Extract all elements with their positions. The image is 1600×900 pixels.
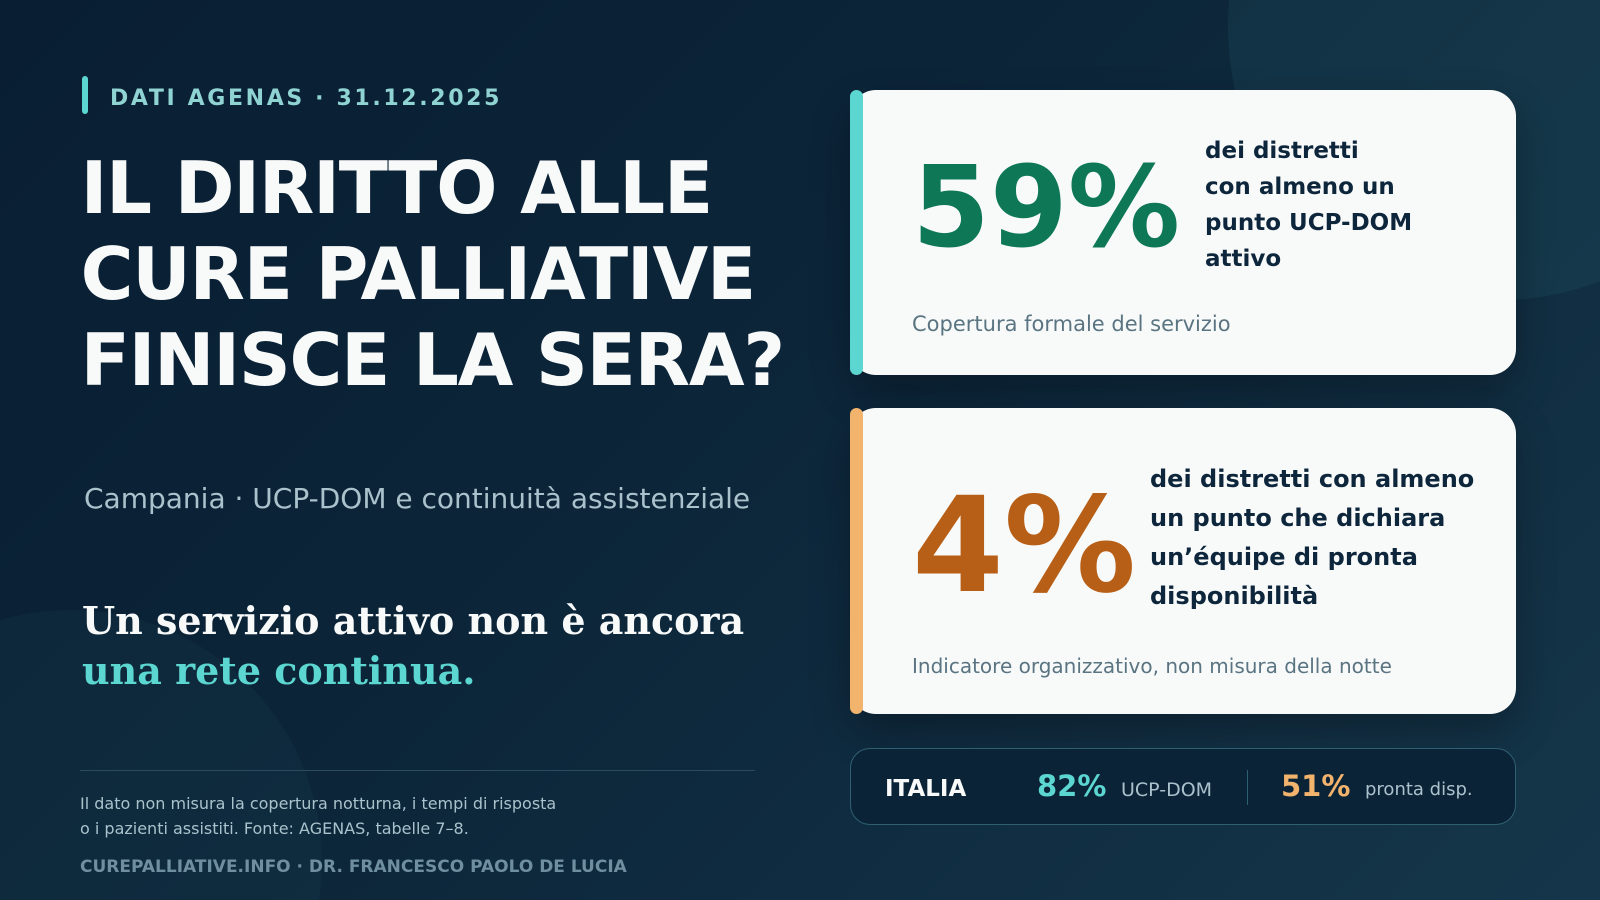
statement: Un servizio attivo non è ancora xyxy=(82,598,744,643)
stat 59% description: dei distretti xyxy=(1205,138,1359,164)
footer divider xyxy=(80,770,755,771)
stat 4% description: un’équipe di pronta xyxy=(1150,543,1418,571)
Italia label: ITALIA xyxy=(885,776,966,802)
title xyxy=(81,146,784,402)
51% value: 51% xyxy=(1281,769,1350,803)
footnote: o i pazienti assistiti. Fonte: AGENAS, tabelle 7–8. xyxy=(80,819,469,838)
stat 59% description: attivo xyxy=(1205,246,1281,272)
stat 4%: 4% xyxy=(912,469,1136,623)
card 2 accent edge xyxy=(850,408,863,714)
title: CURE PALLIATIVE xyxy=(81,232,755,316)
eyebrow text: DATI AGENAS · 31.12.2025 xyxy=(110,86,502,110)
UCP-DOM label: UCP-DOM xyxy=(1121,779,1212,801)
card: 59% xyxy=(850,90,1516,375)
card 1 note: Copertura formale del servizio xyxy=(912,312,1231,336)
stat 59% description: con almeno un xyxy=(1205,174,1395,200)
stat 59%: 59% xyxy=(912,143,1180,273)
Italy comparison bar xyxy=(850,748,1516,825)
title: IL DIRITTO ALLE xyxy=(81,146,712,230)
statement: una rete continua. xyxy=(82,648,475,693)
stat 59% description: punto UCP-DOM xyxy=(1205,210,1412,236)
stat 4% description: disponibilità xyxy=(1150,582,1318,610)
82% value: 82% xyxy=(1037,769,1106,803)
footnote: Il dato non misura la copertura notturna, i tempi di risposta xyxy=(80,794,556,813)
card 2 note: Indicatore organizzativo, non misura della notte xyxy=(912,654,1392,678)
credit: CUREPALLIATIVE.INFO · DR. FRANCESCO PAOLO DE LUCIA xyxy=(80,857,627,877)
stat 4% description xyxy=(1150,465,1474,610)
card: 4% xyxy=(850,408,1516,714)
eyebrow accent bar xyxy=(82,76,88,114)
stat 4% description: dei distretti con almeno xyxy=(1150,465,1474,493)
title: FINISCE LA SERA? xyxy=(81,318,784,402)
divider xyxy=(1247,770,1248,805)
subtitle: Campania · UCP-DOM e continuità assistenziale xyxy=(84,482,750,515)
card 1 accent edge xyxy=(850,90,863,375)
stat 59% description xyxy=(1205,138,1412,272)
pronta disp. label: pronta disp. xyxy=(1365,779,1473,800)
statement xyxy=(82,598,744,693)
footnote xyxy=(80,794,556,838)
stat 4% description: un punto che dichiara xyxy=(1150,504,1445,532)
